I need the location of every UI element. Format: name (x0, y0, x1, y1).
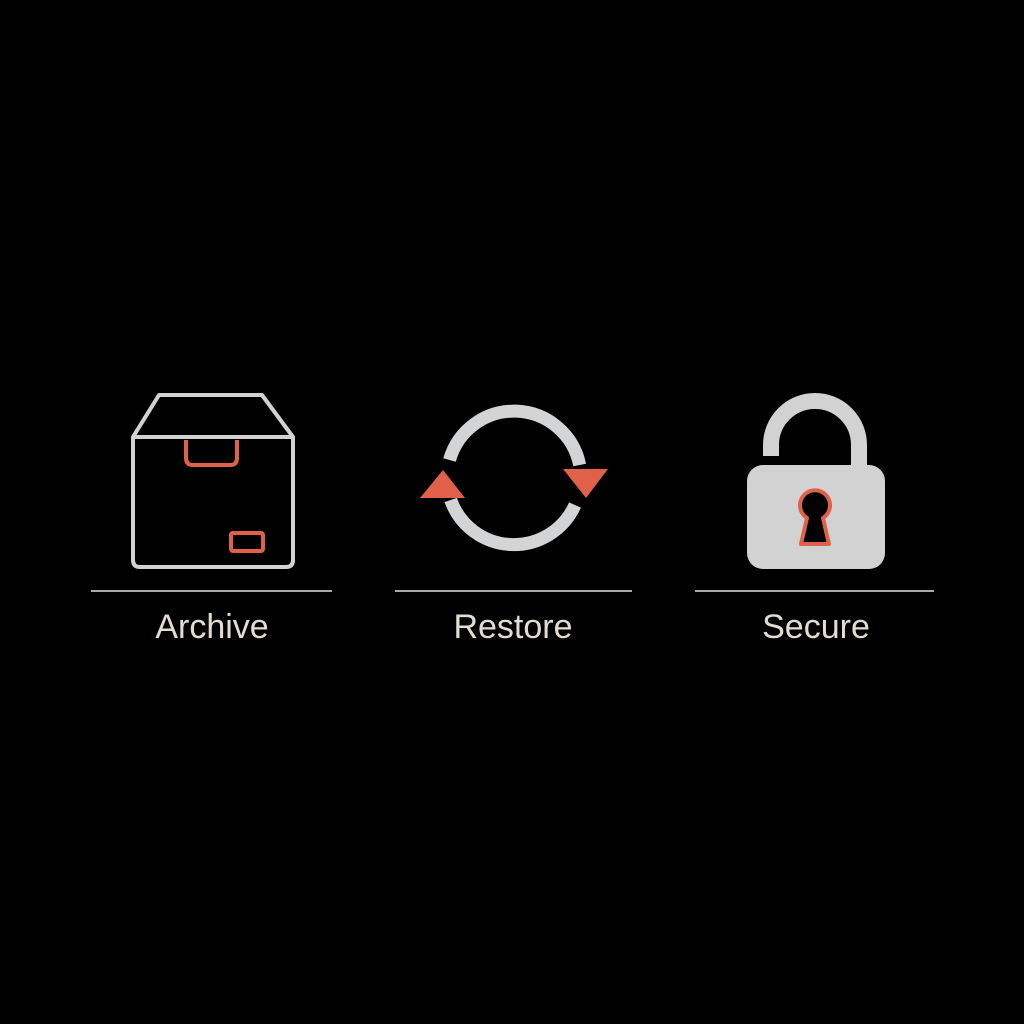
panel: secure (695, 401, 934, 646)
icon: refresh arrows (420, 411, 608, 545)
panel: archive (91, 395, 332, 646)
label: Restore: Restore (453, 608, 573, 646)
panel: restore (395, 411, 632, 646)
label: Archive: Archive (155, 608, 269, 646)
icon: box (133, 395, 293, 567)
icon: padlock (747, 401, 885, 569)
label: Secure: Secure (762, 608, 870, 646)
